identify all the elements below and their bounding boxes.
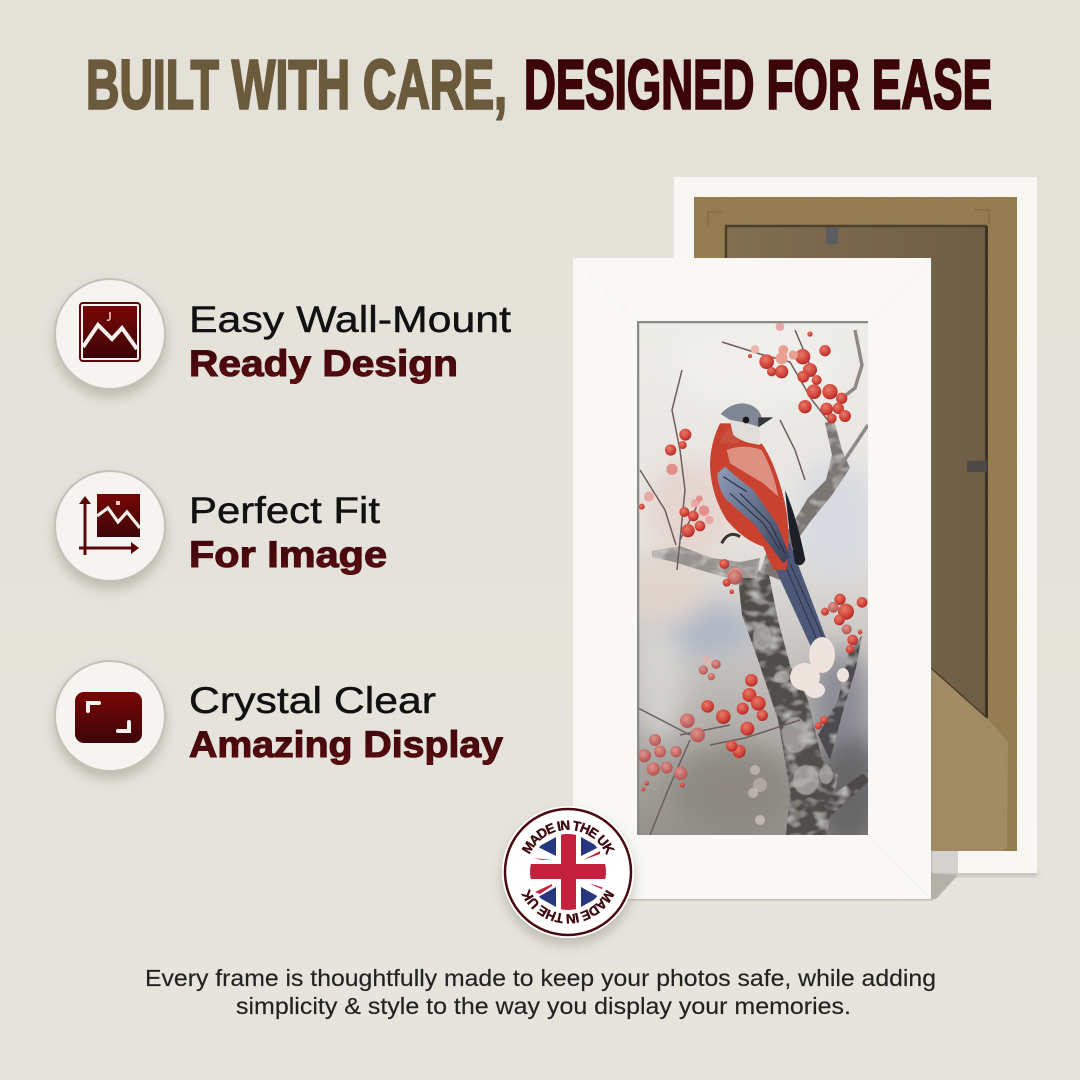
head xyxy=(730,421,760,444)
cardboard backing xyxy=(694,197,1017,851)
text: crystal clear amazing display: Amazing Display xyxy=(189,724,503,765)
side clip xyxy=(967,461,987,472)
blossoms xyxy=(748,637,849,825)
tree trunk and main branches xyxy=(652,420,868,835)
feature: easy wall-mount xyxy=(55,279,512,389)
body xyxy=(710,423,788,570)
chest feathers xyxy=(727,447,778,497)
artwork: bird on a berry branch xyxy=(637,321,868,835)
foot xyxy=(722,534,740,543)
text: easy wall-mount ready design xyxy=(189,299,512,384)
title: BUILT WITH CARE, xyxy=(86,46,507,124)
text: easy wall-mount ready design: Ready Design xyxy=(189,343,458,384)
wing xyxy=(717,467,790,563)
picture inner bevel xyxy=(638,322,868,835)
icon: display with focus corners xyxy=(55,661,165,771)
text: easy wall-mount ready design: Easy Wall-Mount xyxy=(189,299,512,340)
thin twigs xyxy=(838,330,868,470)
front white frame xyxy=(573,258,933,900)
support flap xyxy=(931,668,1008,851)
hanger clip xyxy=(826,227,838,244)
lower berries xyxy=(638,570,867,791)
footer text: simplicity & style to the way you display your memories. xyxy=(236,993,851,1019)
text: perfect fit for image xyxy=(189,490,387,575)
icon: image with dimension arrows xyxy=(55,471,165,581)
recessed panel xyxy=(726,226,987,736)
icon: wall mount picture xyxy=(55,279,165,389)
text: crystal clear amazing display xyxy=(189,680,503,765)
primaries xyxy=(785,490,805,565)
bird xyxy=(710,403,826,648)
bark highlights xyxy=(753,624,833,795)
top berries xyxy=(639,322,851,582)
text: perfect fit for image: Perfect Fit xyxy=(189,490,381,531)
badge: made in the UK: MADE IN THE UK xyxy=(521,888,614,924)
frame shadow band xyxy=(931,851,958,873)
footer text xyxy=(145,965,936,1019)
tail xyxy=(776,543,826,646)
back of frame xyxy=(660,177,1038,876)
feature: crystal clear xyxy=(55,661,503,771)
text: perfect fit for image: For Image xyxy=(189,534,387,575)
text: crystal clear amazing display: Crystal Clear xyxy=(189,680,436,721)
wall shadow of front frame xyxy=(931,873,958,899)
feature: perfect fit xyxy=(55,471,387,581)
badge: made in the UK: MADE IN THE UK xyxy=(522,820,615,856)
badge: made in the UK xyxy=(497,806,640,950)
union flag xyxy=(530,834,606,910)
footer text: Every frame is thoughtfully made to keep your photos safe, while adding xyxy=(145,965,936,991)
watercolour wash xyxy=(640,459,868,835)
